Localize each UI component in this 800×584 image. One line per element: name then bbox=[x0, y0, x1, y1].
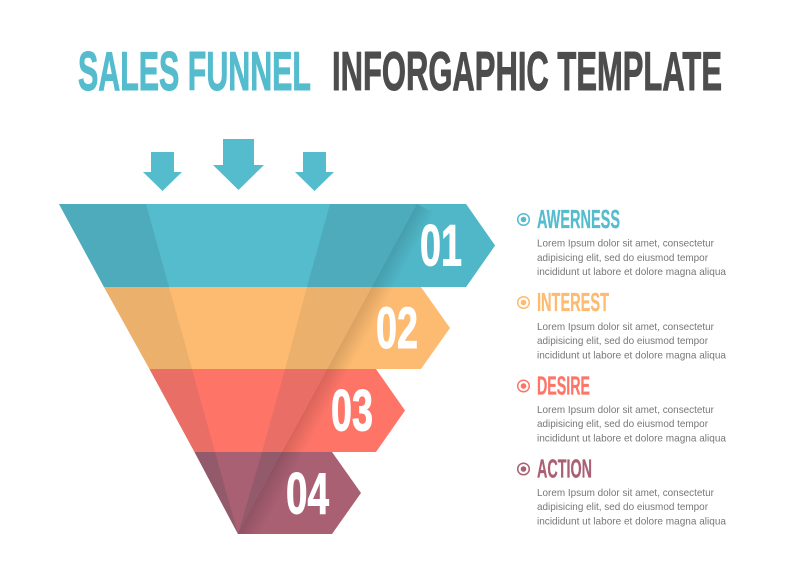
arrow: centre bbox=[213, 139, 264, 190]
list item: action bbox=[518, 454, 726, 528]
heading: action: ACTION bbox=[537, 454, 592, 484]
body text: adipisicing elit, sed do eiusmod tempor bbox=[537, 335, 708, 347]
icon: plum bullet bbox=[518, 463, 529, 475]
icon: red bullet bbox=[518, 380, 529, 392]
body text: adipisicing elit, sed do eiusmod tempor bbox=[537, 418, 708, 430]
band 1: awerness bbox=[59, 204, 495, 287]
body text: incididunt ut labore et dolore magna aliqua bbox=[537, 350, 726, 362]
body text: Lorem Ipsum dolor sit amet, consectetur bbox=[537, 321, 714, 333]
body text: Lorem Ipsum dolor sit amet, consectetur bbox=[537, 487, 714, 499]
funnel chart bbox=[59, 204, 495, 550]
title bbox=[78, 40, 722, 102]
body text: adipisicing elit, sed do eiusmod tempor bbox=[537, 501, 708, 513]
list item: interest bbox=[518, 287, 726, 362]
band 2: interest bbox=[104, 287, 450, 369]
body text bbox=[537, 321, 726, 362]
icon: orange bullet bbox=[518, 297, 529, 308]
arrow: right bbox=[295, 152, 334, 191]
heading: awerness: AWERNESS bbox=[537, 204, 620, 234]
body text: incididunt ut labore et dolore magna aliqua bbox=[537, 266, 726, 278]
body text bbox=[537, 487, 726, 528]
body text: Lorem Ipsum dolor sit amet, consectetur bbox=[537, 238, 714, 250]
number 03: 03 bbox=[331, 378, 373, 444]
number 01: 01 bbox=[420, 214, 462, 278]
body text: adipisicing elit, sed do eiusmod tempor bbox=[537, 252, 708, 264]
band 4: action bbox=[194, 452, 361, 534]
body text bbox=[537, 404, 726, 444]
fold shadow bbox=[238, 204, 428, 534]
body text: incididunt ut labore et dolore magna aliqua bbox=[537, 432, 726, 444]
band 3: desire bbox=[150, 369, 405, 452]
number 04: 04 bbox=[286, 462, 329, 526]
list item: desire bbox=[518, 370, 726, 444]
number 02: 02 bbox=[376, 296, 418, 361]
body text bbox=[537, 238, 726, 278]
list item: awerness bbox=[518, 204, 726, 278]
heading: interest: INTEREST bbox=[537, 287, 609, 317]
icon: teal bullet bbox=[518, 214, 529, 225]
icon: three down arrows bbox=[143, 139, 334, 191]
arrow: left bbox=[143, 152, 182, 191]
heading: desire: DESIRE bbox=[537, 370, 590, 400]
body text: incididunt ut labore et dolore magna aliqua bbox=[537, 516, 726, 528]
body text: Lorem Ipsum dolor sit amet, consectetur bbox=[537, 404, 714, 416]
title: sales funnel: SALES FUNNEL bbox=[78, 40, 311, 102]
